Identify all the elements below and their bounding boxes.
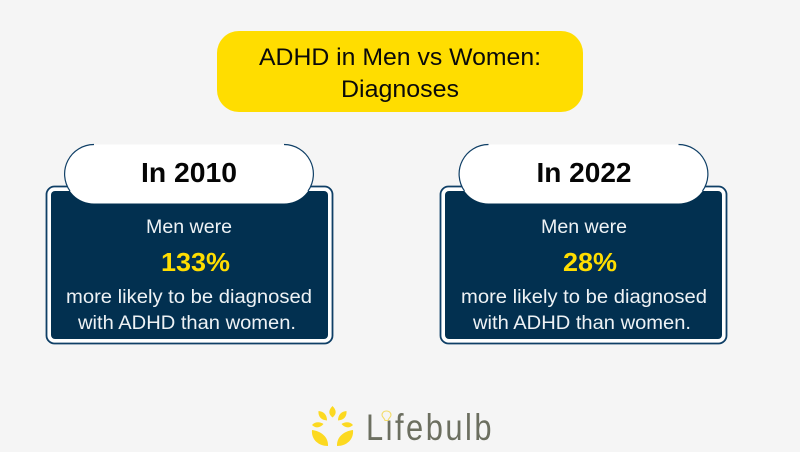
- text: Men were: Men were: [146, 217, 232, 238]
- text: description 2022: [461, 287, 707, 334]
- title: ADHD in Men vs Women:: [259, 44, 541, 71]
- text: Men were: Men were: [541, 217, 627, 238]
- title: Diagnoses: [341, 76, 459, 103]
- panel: In 2022: [440, 144, 726, 344]
- icon: bulb dot: [382, 411, 391, 420]
- pill heading: In 2022: [459, 144, 708, 204]
- text: description 2010: [66, 287, 312, 334]
- text: description 2010: more likely to be diagnosed: [66, 287, 312, 308]
- pill heading: In 2022: In 2022: [536, 157, 632, 188]
- pill heading: In 2010: [64, 144, 314, 204]
- statistic: 28%: 28%: [563, 247, 617, 277]
- text: description 2022: more likely to be diagnosed: [461, 287, 707, 308]
- statistic: 133%: 133%: [161, 247, 230, 277]
- text: description 2022: with ADHD than women.: [472, 313, 691, 334]
- wordmark: Lifebulb: [366, 407, 494, 448]
- logo: Lifebulb: [312, 406, 494, 448]
- panel: In 2010: [46, 144, 332, 344]
- pill heading: In 2010: In 2010: [141, 157, 237, 188]
- icon: sun leaves: [312, 406, 353, 446]
- title: [217, 31, 583, 112]
- text: description 2010: with ADHD than women.: [77, 313, 296, 334]
